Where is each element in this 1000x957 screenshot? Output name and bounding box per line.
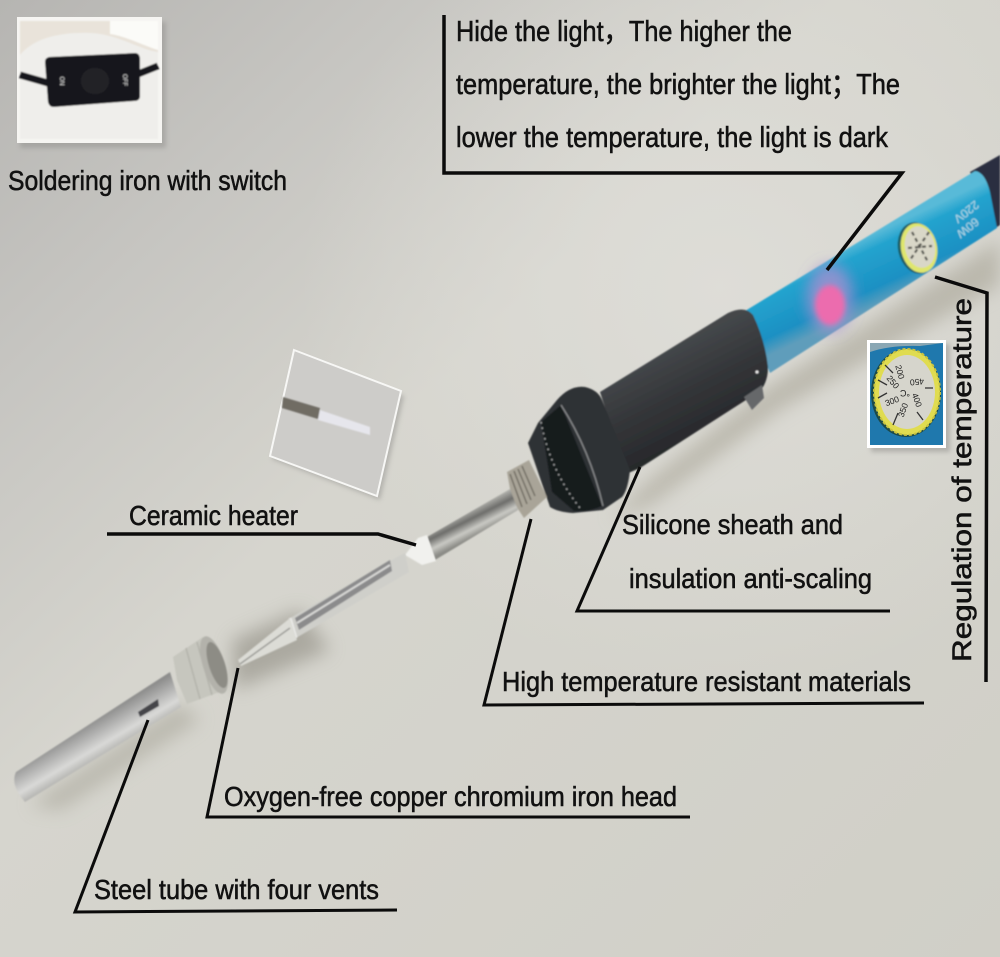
callout: indicator light text: temperature, the brighter the light；The [456,69,900,101]
dial numbers [884,364,925,418]
switch labels [58,74,127,86]
dial numbers: °C [899,388,910,398]
inset photo: ceramic heater [270,350,404,500]
switch body [45,53,140,107]
tube wattage print: 60W [953,215,982,241]
threaded connector [507,460,547,518]
label: silicone sheath: insulation anti-scaling [629,563,872,594]
dial numbers: 300 [884,394,901,408]
label: steel tube: Steel tube with four vents [94,874,379,905]
heater core [318,410,370,435]
soldering iron: tip sleeve [238,553,409,666]
label: high temperature materials: High temperature resistant materials [502,666,911,697]
dial numbers: 200 [893,364,907,380]
label: silicone sheath: Silicone sheath and [622,509,843,540]
black silicone grip [600,309,768,474]
heater sleeve [282,397,320,419]
label: copper chromium iron head: Oxygen-free copper chromium iron head [224,781,677,812]
front collar [528,387,630,513]
soldering iron: handle and tube [427,155,1000,560]
switch labels: ON [58,76,64,86]
callout: indicator light text: lower the temperature, the light is dark [456,122,888,154]
leader line: regulation of temperature [935,277,987,682]
temperature dial on handle [893,219,942,277]
tube wattage print [951,198,982,241]
dial numbers: 350 [896,401,910,418]
nut [173,637,225,704]
switch cable [20,66,158,83]
leader line: silicone sheath [577,467,890,611]
indicator light glow [807,264,853,332]
label: regulation of temperature: Regulation of temperature [947,298,977,662]
leader line: steel tube [75,720,397,912]
caption: soldering iron with switch: Soldering iron with switch [8,165,287,196]
leader line: indicator light [444,15,902,270]
rocker button [81,68,109,94]
dial numbers: 250 [885,373,902,391]
leader line: ceramic heater [107,534,416,545]
steel tube [14,672,181,802]
switch labels: OFF [121,74,127,86]
nut disc [194,633,234,697]
blue tube [745,171,997,373]
vent slot [138,699,159,717]
dark handle end [970,155,1000,229]
soldering iron: retaining nut and steel tube [14,633,234,802]
inset photo: temperature dial [867,340,950,452]
tapered tip [238,618,297,666]
tube wattage print: 220V [951,198,982,226]
soldering iron shadow [30,240,1000,810]
label: silicone sheath [622,509,872,594]
soldering iron: ceramic heater [405,535,436,565]
inset photo: inline switch [17,17,166,148]
dial numbers: 450 [909,376,925,388]
label: ceramic heater: Ceramic heater [129,500,298,531]
dial numbers: 400 [910,392,924,409]
callout: indicator light text [456,16,900,154]
callout: indicator light text: Hide the light，The higher the [456,16,792,48]
leader line: iron head [207,668,690,817]
leader line: high temperature materials [484,519,924,705]
steel barrel [427,489,518,560]
grip side clip [744,385,764,410]
